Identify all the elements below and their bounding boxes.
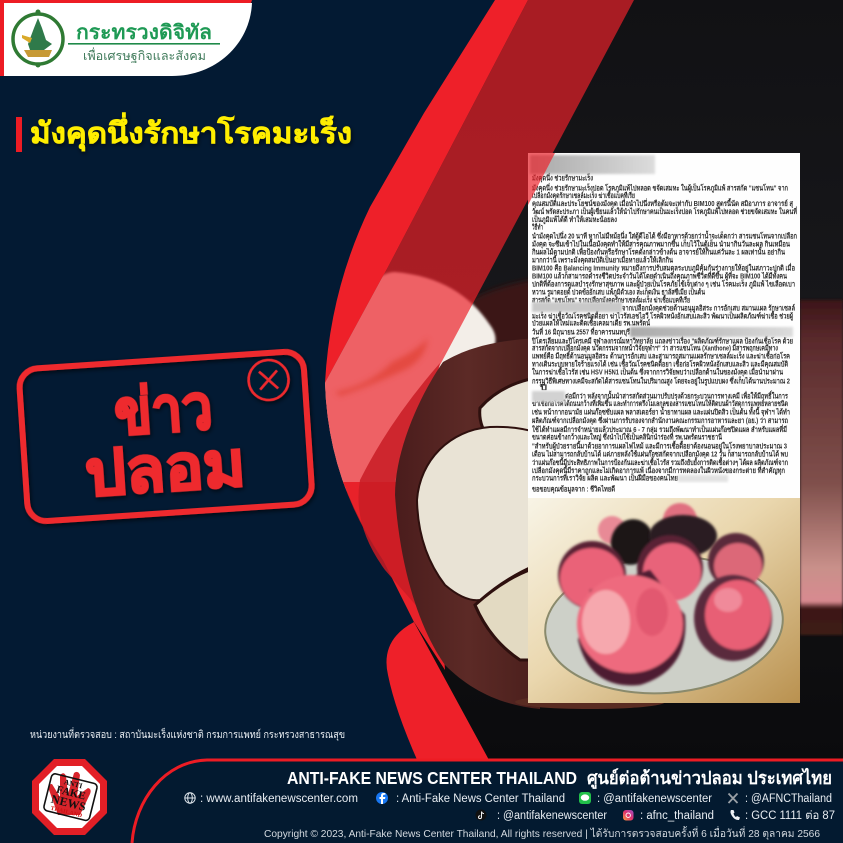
article body: กระบวนการที่เราวิจัย ผลิต และพัฒนา เป็นฝีมือของคนไทย [532,472,678,482]
ministry rule [68,43,220,45]
stamp word one: ข่าว [112,373,215,448]
badge white plate [4,3,252,76]
x handle: : @AFNCThailand [745,793,832,805]
article body: ขนาดค่อนข้างกว้างและใหญ่ ซึ่งนำไปใช้เป็นคลินิกนำร่องที่ รพ.นพรัตนราชธานี [532,430,723,442]
card paper [528,153,800,498]
white flesh segment top [480,378,535,440]
wood table [528,498,800,703]
footer curved red rule [132,760,843,843]
article body: เป็นภูมิแพ้ได้ดี ทำให้เสมหะน้อยลง [532,214,617,225]
stamp word two: ปลอม [83,430,247,509]
fruit: left [558,541,626,609]
redaction 2 [630,327,793,337]
fruit: big front [577,570,685,685]
dark rind cap left [608,517,652,567]
tiktok handle: : @antifakenewscenter [497,810,607,822]
badge red edge [0,0,252,76]
anti-fake news logo [32,759,107,835]
copyright: Copyright © 2023, Anti-Fake News Center Thailand, All rights reserved | ได้รับการตรวจสอบครั้งที่ 6 เมื่อวันที่ 28 ตุลาคม 2566 [264,826,820,840]
icon: instagram [623,810,634,820]
redacted header [530,155,655,174]
ministry name: กระทรวงดิจิทัล [76,22,212,44]
logo words: ANTI [63,777,84,791]
source agency note: หน่วยงานที่ตรวจสอบ : สถาบันมะเร็งแห่งชาติ กรมการแพทย์ กระทรวงสาธารณสุข [30,727,345,741]
footer fill [0,760,843,843]
dark rind cap right [649,515,717,557]
article body [531,172,797,494]
stamp cross icon [247,359,290,401]
redaction 4 [678,475,728,482]
article body: "สำหรับผู้ป่วยรายนี้มาด้วยอาการแผลไฟไหม้ และมีการเชื้อดื้อยาต้องนอนอยู่ในโรงพยาบาลประมาณ 3 [532,440,787,452]
instagram handle: : afnc_thailand [640,810,714,822]
screenshot card: steamed mangosteen photo [528,498,800,703]
mangosteen rind [395,338,540,709]
article body: จากเปลือกมังคุดช่วยต้านอนุมูลอิสระ การอักเสบ สมานแผล รักษาเซลล์ [622,304,795,314]
screenshot card: article text [528,153,800,498]
fake news stamp [18,351,313,522]
article body: ขอขอบคุณข้อมูลจาก : ชีวิตไทยดี [532,484,615,494]
phone number: : GCC 1111 ต่อ 87 [745,810,835,822]
footer heading thai: ศูนย์ต่อต้านข่าวปลอม ประเทศไทย [587,767,832,790]
solid red under rind [343,482,445,670]
icon: web [185,793,195,803]
article body: เปลือกมังคุดนี้มีราคาถูกและไม่เกิดอาการแพ้ เนื่องจากมีการทดลองในผิวหนังของกระต่าย ที่สำคัญทุก [532,464,785,476]
stamp box [43,773,98,821]
article body: มังคุดนึ่ง ช่วยรักษามะเร็ง [532,172,593,182]
stamp frame [18,351,313,522]
fruit: right top [708,533,764,589]
translucent red band overlay [325,0,634,570]
footer heading latin: ANTI-FAKE NEWS CENTER THAILAND [287,768,577,788]
ministry emblem [13,10,63,68]
icon: x [728,794,738,803]
article body: หวาน รูมาตอยด์ ปวดข้ออักเสบ แพ้ภูมิตัวเอง สะเก็ดเงิน ธาลัสซีเมีย เป็นต้น [532,286,706,298]
article body: สารสกัด "แซนโทน" จากเปลือกมังคุดรักษาเซลล์มะเร็ง ฆ่าเชื้อแบคทีเรีย [532,294,690,304]
rind bottom sliver [515,695,665,709]
fruit: middle [637,535,703,601]
translucent rind edge [358,363,440,610]
rear fruit rind [472,278,528,343]
stamp box: NEWS [50,792,88,814]
fruit: right front [694,575,772,661]
line handle: : @antifakenewscenter [597,793,712,805]
white flesh segment lower [475,568,535,660]
background photo: mangosteen on dark surface [320,0,843,760]
article body: ปี [538,383,547,392]
white flesh segment big [417,427,535,600]
icon: phone [730,810,740,820]
redaction 3 [532,391,565,402]
title accent bar [16,117,22,152]
back pink fruit [662,502,698,520]
article body: วันที่ 16 มิถุนายน 2557 ที่อาคารนนทบุรี [532,326,630,336]
back pink fruit 2 [598,516,626,544]
octagon [32,759,107,835]
icon: facebook [376,792,388,804]
website: : www.antifakenewscenter.com [200,793,358,805]
facebook handle: : Anti-Fake News Center Thailand [396,793,565,805]
ministry tagline: เพื่อเศรษฐกิจและสังคม [83,47,206,63]
header badge [0,0,252,76]
article body: เปลือกมังคุดรักษาเซลล์มะเร็ง ฆ่าเชื้อแบคทีเรีย [532,189,635,200]
article body: มังคุด จะซึมเข้าไปในเนื้อมังคุดทำให้มีสารคุณภาพมากขึ้น เก็บไว้ในตู้เย็น นำมากินวันละผล กินเหมือน [532,238,791,250]
right fruit flesh [800,300,843,635]
rear blurred white flesh [320,272,496,490]
stamp box: FAKE [55,784,87,803]
icon: line [579,792,591,804]
title: มังคุดนึ่งรักษาโรคมะเร็ง [30,112,352,151]
dark surface [320,0,843,760]
redaction 1 [532,302,622,312]
octagon inner [39,766,100,828]
red corner tint on card [528,153,555,205]
article body: วิธีทำ [531,222,543,232]
article body: กินผลไม้ตามปกติ เพื่อป้องกันหรือรักษาโรคดังกล่าวข้างต้น อาจารย์ให้กินแค่วันละ 1 ผลเท่านั้น อย่ากิน [532,246,786,256]
article body: มากกว่านี้ เพราะมังคุดสมบัติเป็นยาเมื่อหายแล้วให้เลิกกิน [532,254,674,264]
red hand [48,772,91,815]
overlay orange blush on flesh [335,338,428,396]
footer panel [0,760,843,843]
red diagonal ribbon [325,0,560,762]
icon: tiktok [476,810,486,820]
stamp box: THAILAND [50,806,83,820]
article body: ป่วยแผลให้ใหม่และติดเชื้อเคลมาเดีย รพ.นพรัตน์ [532,316,651,328]
white plate [544,558,784,694]
